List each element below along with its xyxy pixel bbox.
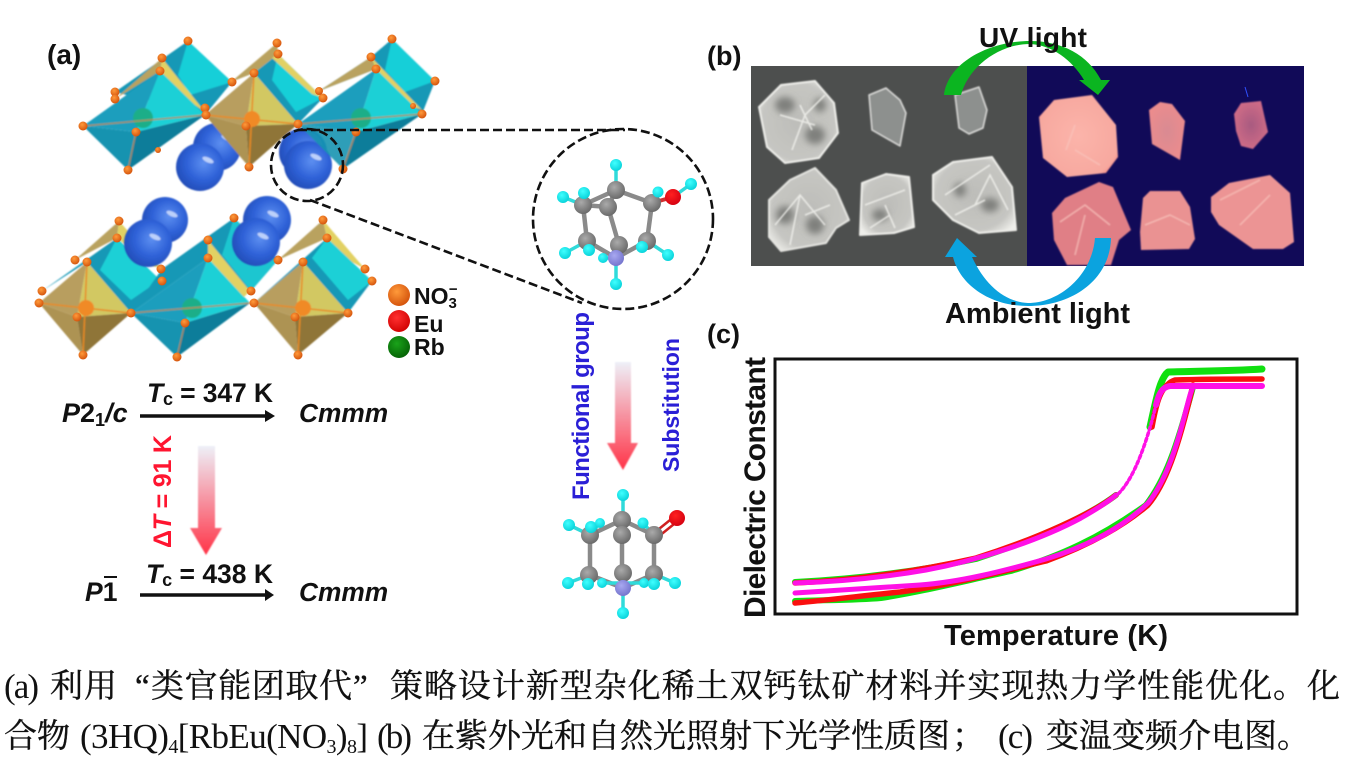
- caption: [4, 667, 1340, 758]
- caption line 2: 合物: [4, 718, 70, 755]
- caption line 1: 策略设计新型杂化稀土双钙钛矿材料并实现热力学性能优化。化: [390, 668, 1340, 705]
- arrow: functional group substitution: [607, 362, 638, 470]
- spheres behind upper layer: [176, 123, 332, 191]
- label: (c): (c): [707, 319, 740, 349]
- caption line 2: ]: [356, 717, 368, 756]
- photo: UV light: [1027, 66, 1304, 266]
- cyan octahedron 3: [298, 69, 422, 169]
- overbar: [104, 576, 117, 578]
- legend: 3: [448, 295, 457, 312]
- x axis label: Temperature (K): [944, 620, 1168, 652]
- caption line 2: ；: [952, 719, 985, 755]
- arrowhead: [265, 410, 275, 422]
- P21/c: P2: [62, 398, 95, 428]
- caption line 2: 变温变频介电图。: [1046, 718, 1310, 755]
- gold octahedron right: [254, 262, 348, 355]
- Tc 347 K: = 347 K: [173, 378, 273, 408]
- caption line 2: 在紫外光和自然光照射下光学性质图: [422, 718, 950, 755]
- lower perovskite layer: [39, 218, 372, 357]
- caption line 2: ): [336, 717, 348, 756]
- upper perovskite layer: [83, 39, 435, 191]
- cyan octahedron centre: [131, 240, 250, 357]
- gold octahedron: [205, 73, 298, 167]
- legend: NO: [414, 283, 448, 309]
- legend: Eu: [414, 311, 443, 337]
- legend: Rb: [414, 334, 445, 360]
- P21/c: /c: [104, 398, 128, 428]
- caption line 2: (3HQ): [80, 717, 169, 756]
- caption line 2: (c): [998, 717, 1033, 756]
- blue cation spheres: [124, 196, 291, 267]
- zoom callout: dashed circles and lines: [271, 129, 713, 309]
- molecule: 3-quinuclidinone: [562, 489, 685, 619]
- caption line 1: “: [135, 669, 150, 705]
- Cmmm top: Cmmm: [299, 398, 388, 428]
- arrowhead: [265, 589, 274, 601]
- Cmmm bottom: Cmmm: [299, 577, 388, 607]
- P-1: P1: [85, 577, 117, 607]
- label: UV light: UV light: [979, 22, 1087, 53]
- arrow: delta T: [190, 446, 222, 555]
- caption line 2: 8: [347, 736, 357, 758]
- caption line 1: 利用: [50, 669, 117, 705]
- legend: [388, 281, 458, 360]
- label: Functional group: Functional group: [568, 312, 595, 500]
- Delta T label: ΔT = 91 K: [149, 435, 177, 548]
- caption line 1: 类官能团取代: [151, 668, 352, 705]
- label: Substitution: Substitution: [658, 338, 684, 472]
- panel: (c) dielectric chart: [739, 357, 1297, 652]
- molecule: 3-hydroxyquinuclidinium: [557, 159, 697, 290]
- Tc 438 K: T: [146, 559, 165, 589]
- gold octahedron left: [39, 262, 131, 355]
- photo: ambient light: [751, 66, 1027, 266]
- caption line 2: [4, 717, 1310, 758]
- y axis label: Dielectric Constant: [739, 357, 772, 618]
- caption line 2: [RbEu(NO: [178, 717, 327, 756]
- cyan octahedron 1: [83, 71, 205, 170]
- panel: (a) crystal structure: [34, 34, 713, 362]
- upper layer atoms: [78, 34, 440, 174]
- Tc 438 K: = 438 K: [172, 559, 273, 589]
- arrow: P21/c to Cmmm: [140, 414, 268, 418]
- legend: −: [449, 281, 458, 298]
- caption line 2: 3: [327, 736, 337, 758]
- caption line 2: (b): [377, 717, 412, 756]
- P21/c: 1: [95, 410, 105, 430]
- green curves: [795, 369, 1262, 601]
- Tc 438 K: c: [162, 570, 172, 590]
- curves: [795, 369, 1262, 603]
- label: (b): (b): [707, 41, 741, 71]
- caption line 2: 4: [168, 736, 178, 758]
- phase transition scheme: [62, 378, 388, 607]
- red curves: [795, 379, 1262, 603]
- arrow: ambient light blue: [945, 238, 1111, 306]
- magenta curves: [795, 386, 1262, 593]
- Tc 347 K: c: [163, 389, 173, 409]
- arrow: UV light green: [944, 41, 1110, 95]
- Tc 347 K: T: [147, 378, 166, 408]
- label: Ambient light: Ambient light: [945, 298, 1130, 330]
- chart frame: [775, 359, 1297, 614]
- arrow: P-1 to Cmmm: [140, 593, 268, 597]
- caption line 1: ”: [353, 669, 368, 705]
- caption line 1: (a): [4, 667, 39, 706]
- label: (a): (a): [47, 39, 81, 70]
- caption line 1: [4, 667, 1340, 706]
- lower layer atoms: [34, 214, 376, 362]
- panel: (b) crystal photographs: [751, 22, 1304, 330]
